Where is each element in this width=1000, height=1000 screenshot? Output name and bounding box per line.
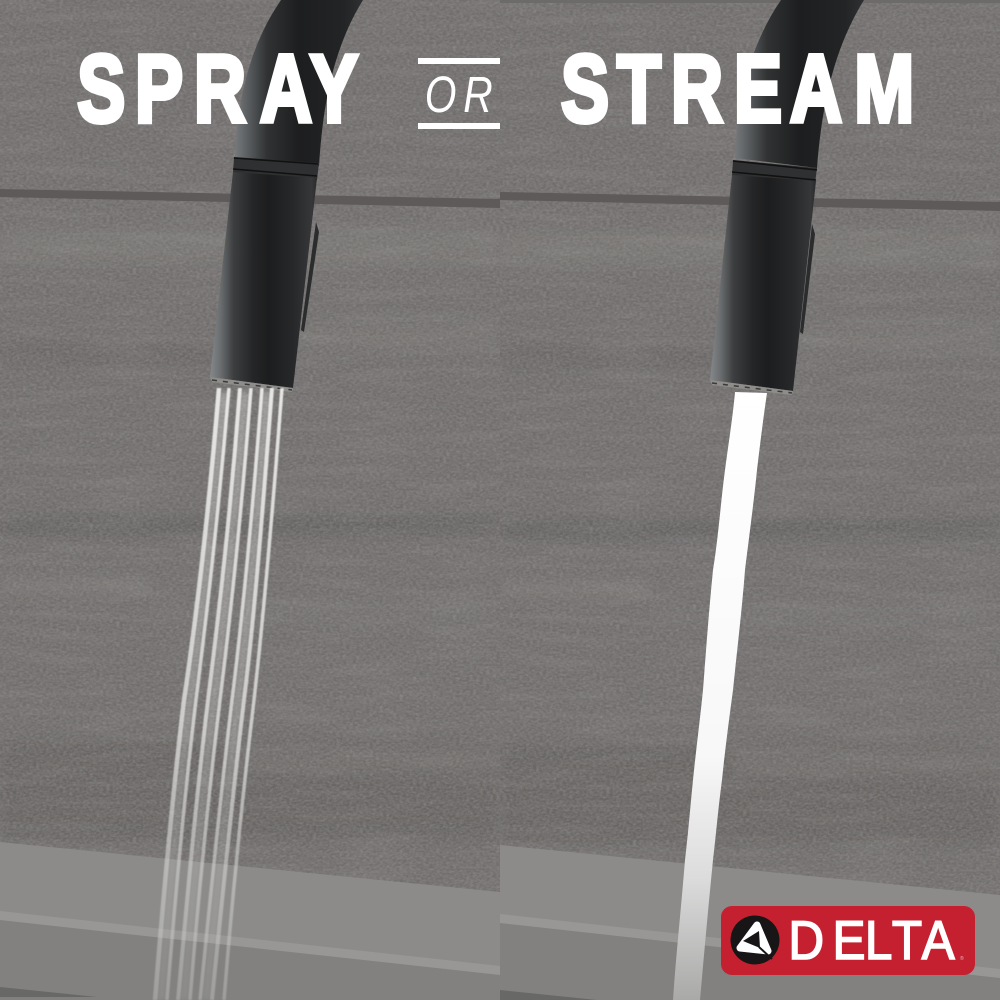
title: SPRAY: SPRAY [77,34,358,142]
water: solid stream [673,392,767,1000]
wordmark: DELTA [788,911,955,972]
panel: stream background [500,3,1000,1000]
logo: Delta [721,906,975,975]
divider label: OR: OR [425,66,493,123]
water: spray streams [155,388,282,1000]
panel: spray background [0,0,500,997]
haze behind the strands [161,392,267,1000]
registered mark: ® [960,955,964,962]
divider label: OR [418,58,500,129]
faucet: stream side [710,0,864,395]
icon: Delta triangle [730,916,780,964]
bottom strip under panels [0,997,500,1000]
faucet: spray side [210,0,363,392]
title: STREAM: STREAM [561,34,914,142]
